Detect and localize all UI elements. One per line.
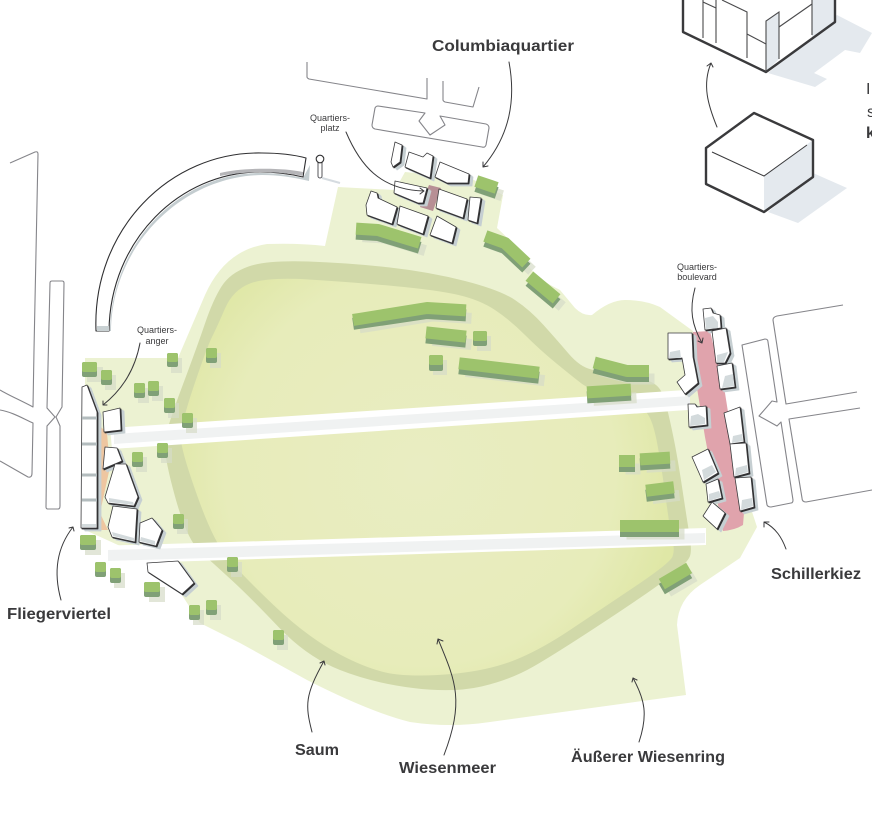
label: Schillerkiez: Schillerkiez <box>771 566 861 583</box>
cropped body text at right edge: I <box>866 81 870 98</box>
label: Quartiersboulevard: Quartiers- <box>677 262 717 272</box>
wiesenmeer inner meadow <box>181 279 674 676</box>
road outlines: west <box>0 152 64 509</box>
label: Aeusserer Wiesenring <box>571 678 725 766</box>
Quartiersboulevard <box>693 331 744 531</box>
label: Quartiersplatz: platz <box>320 123 340 133</box>
isometric building: final shape <box>683 0 872 87</box>
road outlines: east <box>742 305 872 507</box>
label: Saum <box>295 661 339 759</box>
Fliegerviertel building details <box>82 418 155 545</box>
label: Fliegerviertel <box>7 527 111 623</box>
label: Aeusserer Wiesenring: Äußerer Wiesenring <box>571 748 725 766</box>
Schillerkiez building courtyards <box>669 316 753 510</box>
Quartiersanger <box>97 423 110 530</box>
Schillerkiez buildings <box>668 308 754 529</box>
label: Quartiersboulevard <box>677 262 717 343</box>
arrow: box transformation <box>707 63 717 127</box>
Fliegerviertel buildings <box>81 385 194 594</box>
label: Columbiaquartier <box>432 38 574 167</box>
trees <box>80 331 491 650</box>
label: Wiesenmeer <box>399 639 496 777</box>
road outlines: north <box>307 62 489 147</box>
label: Quartiersanger: anger <box>145 336 169 346</box>
isometric building: initial box <box>706 113 847 223</box>
label: Saum: Saum <box>295 742 339 759</box>
label: Quartiersboulevard: boulevard <box>677 272 717 282</box>
label: Quartiersanger <box>103 325 177 405</box>
label: Schillerkiez <box>764 522 861 583</box>
curved terminal building <box>96 153 310 331</box>
Columbiaquartier buildings <box>366 142 481 243</box>
upper white strip path <box>110 390 690 449</box>
label: Wiesenmeer: Wiesenmeer <box>399 760 496 777</box>
Columbiaquartier plaza <box>420 185 441 211</box>
cropped body text at right edge <box>866 81 872 142</box>
keyhole tower <box>316 155 340 183</box>
outer meadow ring <box>85 172 757 725</box>
label: Quartiersplatz: Quartiers- <box>310 113 350 123</box>
label: Fliegerviertel: Fliegerviertel <box>7 606 111 623</box>
saum ring <box>165 261 691 690</box>
label: Columbiaquartier: Columbiaquartier <box>432 38 574 55</box>
label: Quartiersplatz <box>310 113 424 194</box>
lower white strip path <box>96 528 706 564</box>
hedges: tree rows <box>359 183 690 589</box>
label: Quartiersanger: Quartiers- <box>137 325 177 335</box>
